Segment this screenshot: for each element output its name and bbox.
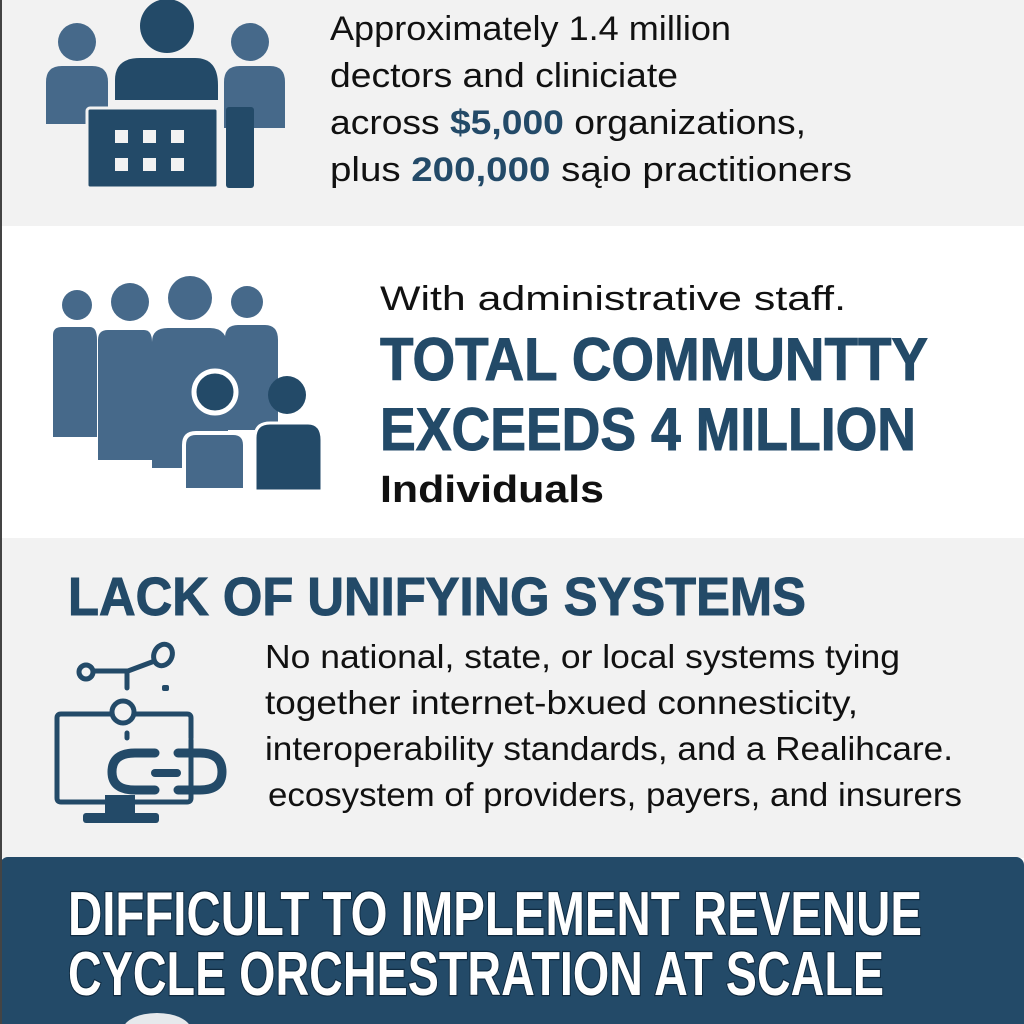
text: systems description: together internet-bxued connesticity, xyxy=(265,684,858,721)
text: clinicians stats: dectors and cliniciate xyxy=(330,57,678,95)
icon: people with building xyxy=(46,0,285,188)
left border xyxy=(0,0,2,1024)
text: clinicians stats: across $5,000 organizations, xyxy=(330,104,806,142)
heading: revenue cycle orchestration xyxy=(68,880,922,1009)
text: clinicians stats xyxy=(330,10,852,189)
heading: lack of unifying systems: LACK OF UNIFYING SYSTEMS xyxy=(68,567,806,627)
panel: total community xyxy=(0,226,1024,538)
text: community headline: Individuals xyxy=(380,469,604,511)
text: clinicians stats: plus 200,000 sąio practitioners xyxy=(330,151,852,189)
text: systems description xyxy=(265,638,962,813)
text: community headline: With administrative staff. xyxy=(380,280,846,318)
text: clinicians stats: Approximately 1.4 million xyxy=(330,10,731,48)
text: community headline: EXCEEDS 4 MILLION xyxy=(380,396,916,463)
text: systems description: interoperability standards, and a Realihcare. xyxy=(265,730,953,767)
text: community headline: TOTAL COMMUNTTY xyxy=(380,326,928,393)
panel: clinicians xyxy=(0,0,1024,226)
icon: partial bottom icon xyxy=(123,1013,191,1024)
panel: revenue cycle xyxy=(0,857,1024,1024)
text: systems description: No national, state, or local systems tying xyxy=(265,638,900,675)
text: community headline xyxy=(380,280,928,511)
text: systems description: ecosystem of providers, payers, and insurers xyxy=(268,776,962,813)
panel: lack of unifying systems xyxy=(0,538,1024,858)
icon: monitor with broken link xyxy=(57,641,222,802)
icon: crowd xyxy=(53,276,322,491)
